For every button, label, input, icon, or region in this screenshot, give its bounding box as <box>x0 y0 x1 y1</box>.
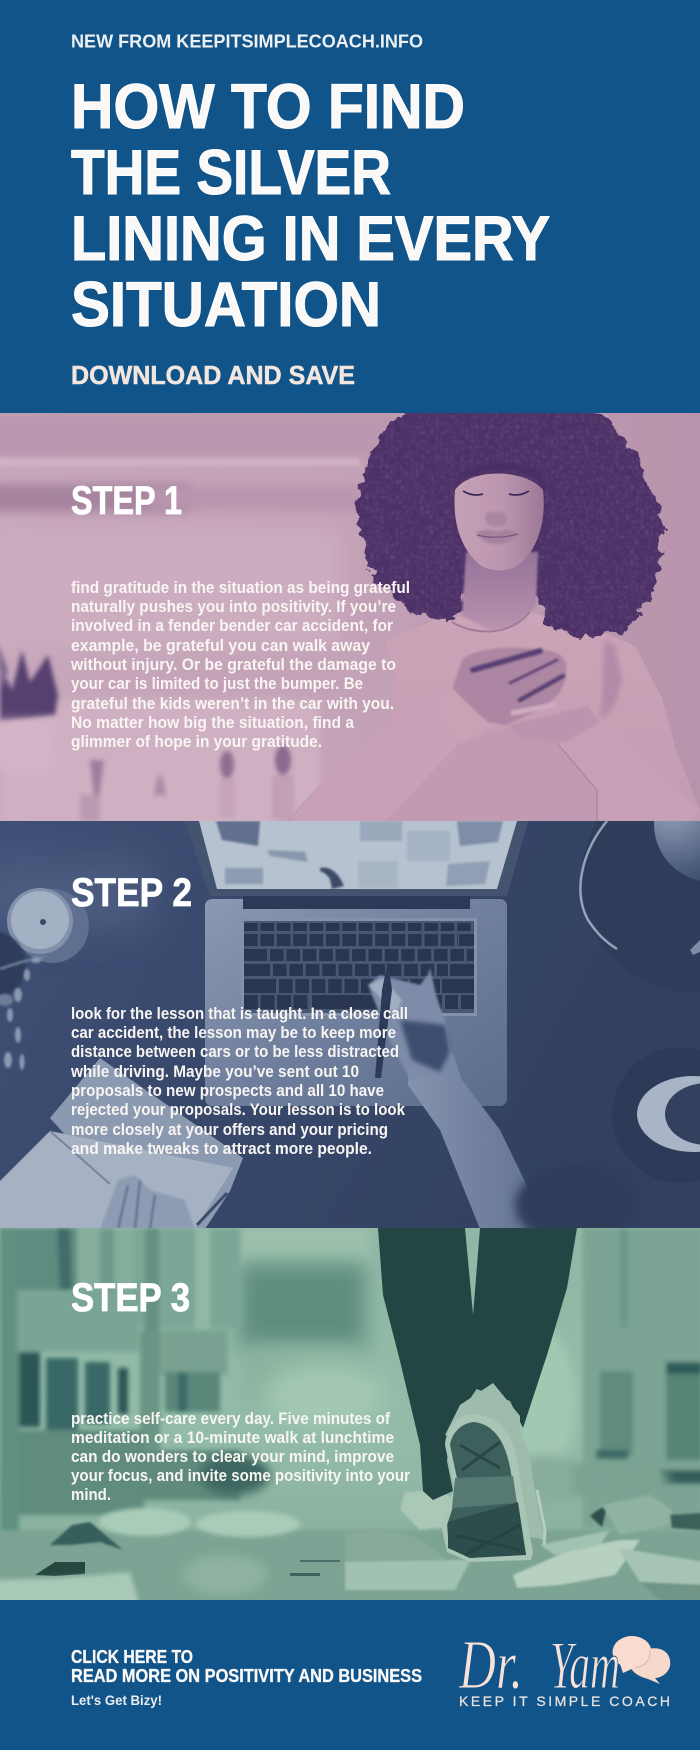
subheading: download and save: DOWNLOAD AND SAVE <box>71 360 355 390</box>
text: step 2 body: distance between cars or to be less distracted <box>71 1043 399 1061</box>
text: step 2 body: rejected your proposals. Your lesson is to look <box>71 1101 406 1119</box>
heading: step 3: STEP 3 <box>71 1276 190 1320</box>
text: step 1 body: your car is limited to just the bumper. Be <box>71 675 363 693</box>
tagline: Let's Get Bizy! <box>71 1692 162 1708</box>
hair <box>358 405 662 637</box>
neck <box>462 552 538 630</box>
left building <box>0 1228 240 1538</box>
text: step 1 body: grateful the kids weren’t in the car with you. <box>71 695 394 713</box>
photo: walking shoe on leafy path <box>0 1228 700 1610</box>
icon: speech bubbles <box>612 1636 670 1684</box>
blurred centre background <box>240 1228 575 1470</box>
text: step 1 body: No matter how big the situation, find a <box>71 714 355 732</box>
text: step 2 body: proposals to new prospects and all 10 have <box>71 1082 384 1100</box>
laptop base <box>205 896 507 1106</box>
text: step 3 body: practice self-care every day. Five minutes of <box>71 1410 390 1428</box>
plate and sphere <box>579 821 700 955</box>
text: step 2 body: car accident, the lesson may be to keep more <box>71 1024 396 1042</box>
logo script: Dr. <box>458 1627 523 1704</box>
text: step 1 body: involved in a fender bender car accident, for <box>71 617 394 635</box>
text: step 1 body: naturally pushes you into positivity. If you’re <box>71 598 396 616</box>
floor and blurred leaves <box>0 1508 700 1610</box>
face <box>454 462 544 571</box>
title: HOW TO FIND <box>71 72 465 142</box>
logo script <box>458 1627 620 1704</box>
candle <box>7 888 89 963</box>
text: step 3 body: meditation or a 10-minute walk at lunchtime <box>71 1429 394 1447</box>
title: SITUATION <box>71 270 381 340</box>
call to action <box>71 1647 422 1686</box>
logo tagline: KEEP IT SIMPLE COACH <box>459 1693 670 1709</box>
notebook <box>0 1058 243 1229</box>
text: step 1 body: example, be grateful you can walk away <box>71 637 371 655</box>
text: step 2 body <box>70 1005 408 1158</box>
laptop screen <box>185 821 528 896</box>
panel: step 3 <box>0 1228 700 1610</box>
eyebrow text: NEW FROM KEEPITSIMPLECOACH.INFO <box>71 32 423 52</box>
text: step 2 body: and make tweaks to attract more people. <box>71 1140 372 1158</box>
photo: woman with hands on heart <box>0 405 700 830</box>
plant sprigs <box>0 931 45 1070</box>
text: step 2 body: while driving. Maybe you’ve sent out 10 <box>70 1063 359 1081</box>
logo: Dr. Yam <box>458 1627 670 1709</box>
plant <box>0 640 58 722</box>
title: THE SILVER <box>71 138 391 208</box>
text: step 2 body: look for the lesson that is taught. In a close call <box>71 1005 408 1023</box>
hands <box>452 646 598 742</box>
text: step 1 body: without injury. Or be grateful the damage to <box>70 656 396 674</box>
panel: step 1 <box>0 405 700 830</box>
text: step 1 body: glimmer of hope in your gratitude. <box>71 733 322 751</box>
panel: header <box>0 0 700 413</box>
text: step 1 body: find gratitude in the situation as being grateful <box>71 579 410 597</box>
panel: step 2 <box>0 821 700 1228</box>
title <box>71 72 550 340</box>
keyboard <box>244 927 474 1002</box>
text: step 3 body <box>71 1410 411 1504</box>
heading: step 1: STEP 1 <box>71 479 182 523</box>
call to action: CLICK HERE TO <box>71 1647 193 1667</box>
text: step 2 body: more closely at your offers and your pricing <box>71 1121 388 1139</box>
heading: step 2: STEP 2 <box>71 871 192 915</box>
coffee cup <box>620 1076 700 1152</box>
text: step 3 body: your focus, and invite some positivity into your <box>71 1467 411 1485</box>
title: LINING IN EVERY <box>71 204 550 274</box>
shelf bottles <box>80 745 294 821</box>
sweater and arms <box>285 612 700 822</box>
hand and arm with pen <box>368 960 548 1229</box>
call to action: READ MORE ON POSITIVITY AND BUSINESS <box>71 1666 422 1686</box>
panel: footer <box>0 1600 700 1750</box>
sneaker <box>441 1383 546 1562</box>
text: step 3 body: mind. <box>71 1486 111 1504</box>
text: step 1 body <box>70 579 410 751</box>
logo script: Yam <box>550 1627 620 1703</box>
legs <box>378 1228 577 1500</box>
text: step 3 body: can do wonders to clear your mind, improve <box>71 1448 394 1466</box>
right leaves <box>345 1454 700 1605</box>
right building <box>583 1228 700 1528</box>
photo: laptop on desk <box>0 821 700 1228</box>
